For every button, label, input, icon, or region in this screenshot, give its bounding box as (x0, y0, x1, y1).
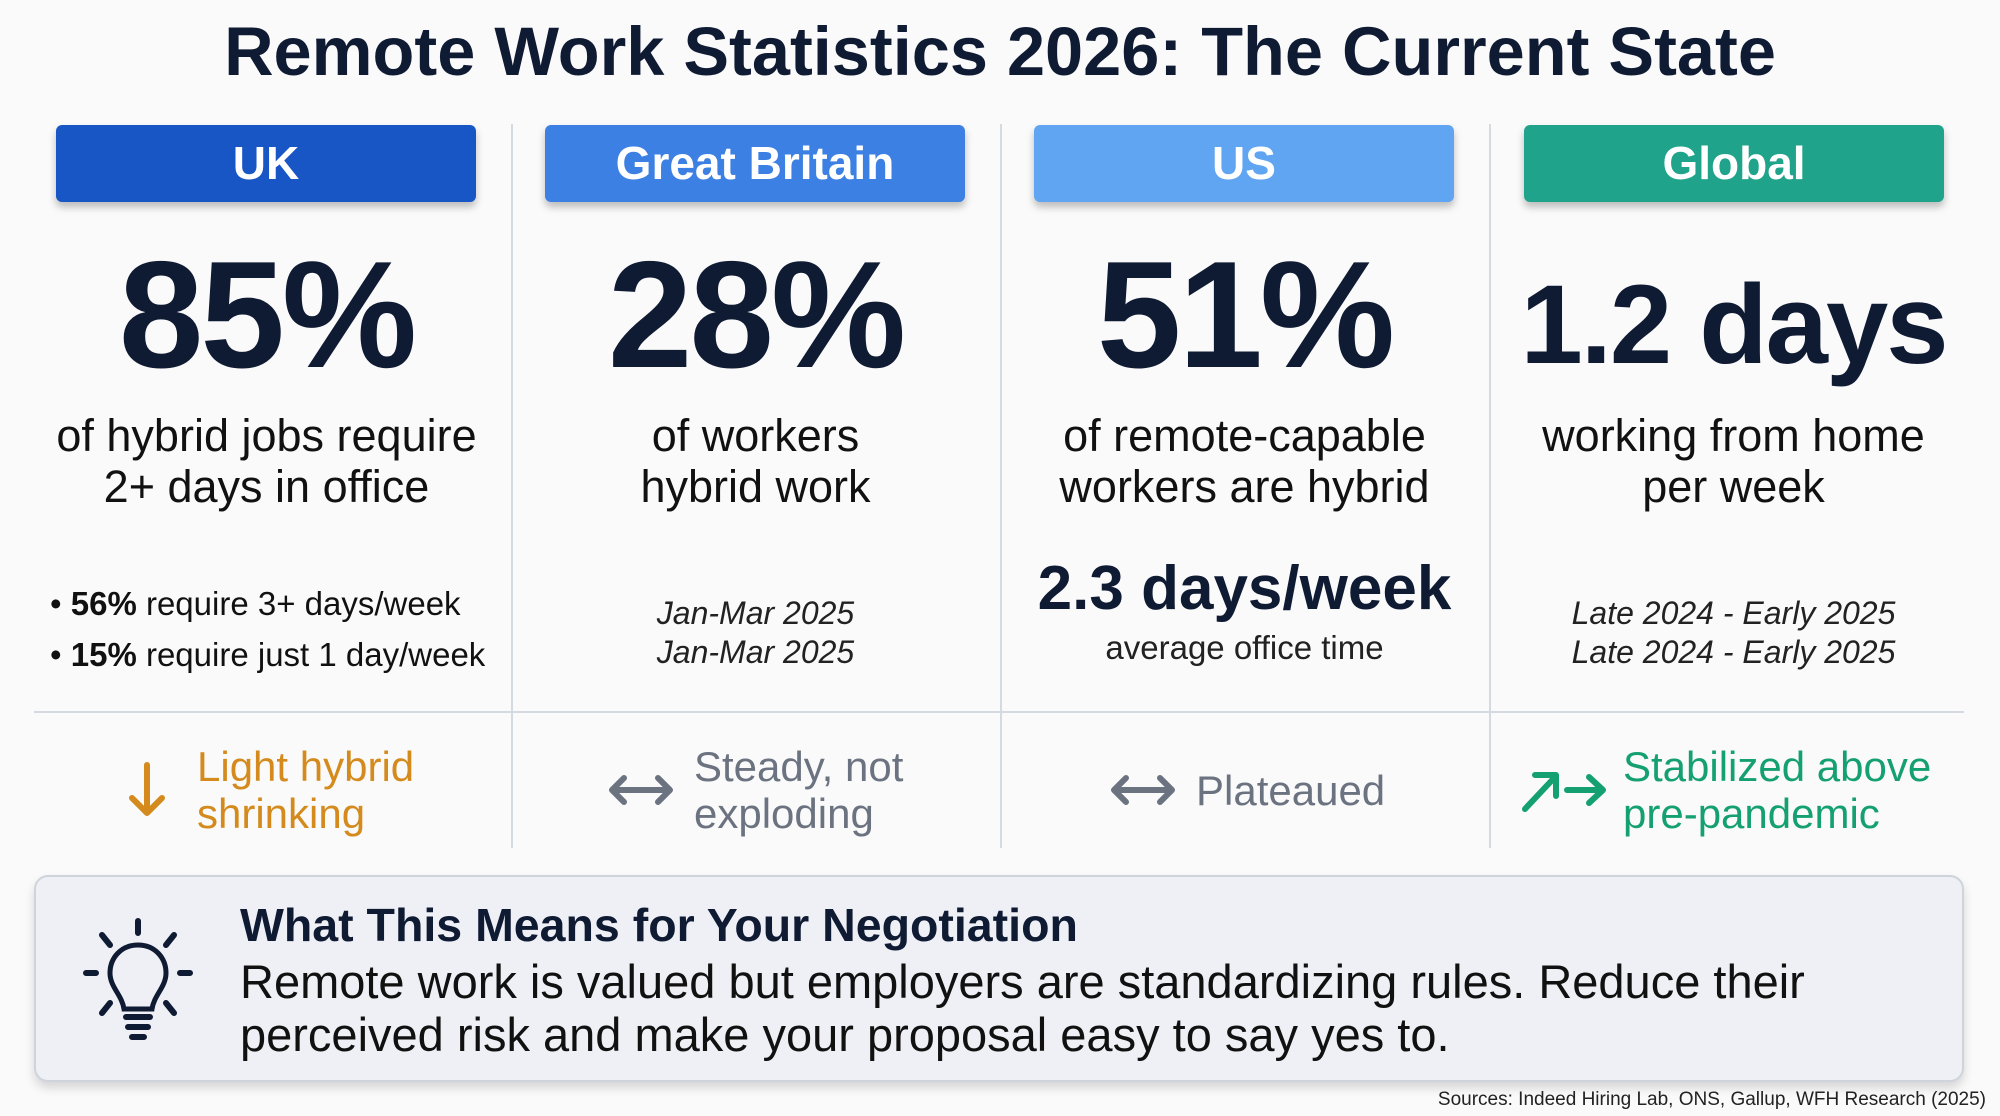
description UK: of hybrid jobs require (56, 410, 477, 461)
header Global (1524, 125, 1944, 202)
trend UK: Light hybrid (197, 743, 414, 790)
trend GB (609, 743, 904, 837)
stat 51%: 51% (1097, 230, 1392, 400)
title: Remote Work Statistics 2026: The Current State (224, 13, 1776, 90)
trend Global: Stabilized above (1623, 743, 1931, 790)
bullets UK: • 56% require 3+ days/week (50, 585, 461, 622)
dates Global: Late 2024 - Early 2025 (1572, 595, 1895, 631)
header UK (56, 125, 476, 202)
callout body: perceived risk and make your proposal easy to say yes to. (240, 1008, 1450, 1061)
callout body (240, 955, 1805, 1061)
panel: Great Britain (541, 125, 969, 837)
header US (1034, 125, 1454, 202)
office time US: average office time (1105, 629, 1384, 666)
office time US: 2.3 days/week (1038, 554, 1451, 623)
sources: Sources: Indeed Hiring Lab, ONS, Gallup, WFH Research (2025) (1438, 1089, 1986, 1110)
trend GB: exploding (694, 790, 874, 837)
header US: US (1212, 137, 1276, 189)
icon: lightbulb (83, 918, 193, 1040)
description UK: 2+ days in office (104, 461, 429, 512)
dates Global: Late 2024 - Early 2025 (1572, 634, 1895, 670)
header Global: Global (1662, 137, 1806, 189)
panel: UK (50, 125, 486, 837)
description Global: per week (1642, 461, 1825, 512)
trend UK: shrinking (197, 790, 365, 837)
header UK: UK (233, 137, 299, 189)
stat 1.2 days: 1.2 days (1520, 262, 1947, 387)
trend US (1111, 766, 1385, 814)
bullets UK: • 15% require just 1 day/week (50, 636, 485, 673)
dates GB: Jan-Mar 2025 (657, 595, 854, 631)
description UK (56, 410, 477, 512)
callout: negotiation (34, 875, 1964, 1082)
trend Global (1522, 743, 1931, 837)
trend GB: Steady, not (694, 743, 903, 790)
panel: Global (1520, 125, 1948, 837)
bullets UK (50, 585, 486, 673)
description Global (1542, 410, 1925, 512)
dates Global (1572, 595, 1896, 670)
stat 28%: 28% (608, 230, 903, 400)
description GB: of workers (652, 410, 859, 461)
header GB (545, 125, 965, 202)
dates GB: Jan-Mar 2025 (657, 634, 854, 670)
trend UK (129, 743, 414, 837)
callout heading: What This Means for Your Negotiation (240, 899, 1078, 951)
stat 85%: 85% (119, 230, 414, 400)
dates GB (656, 595, 854, 670)
description US (1059, 410, 1430, 512)
panel: US (1030, 125, 1458, 814)
description US: of remote-capable (1063, 410, 1426, 461)
header GB: Great Britain (616, 137, 894, 189)
trend Global: pre-pandemic (1623, 790, 1880, 837)
callout body: Remote work is valued but employers are standardizing rules. Reduce their (240, 955, 1805, 1008)
description US: workers are hybrid (1059, 461, 1430, 512)
description GB (640, 410, 871, 512)
office time US (1038, 554, 1452, 666)
description Global: working from home (1542, 410, 1925, 461)
description GB: hybrid work (640, 461, 871, 512)
trend US: Plateaued (1196, 766, 1385, 814)
